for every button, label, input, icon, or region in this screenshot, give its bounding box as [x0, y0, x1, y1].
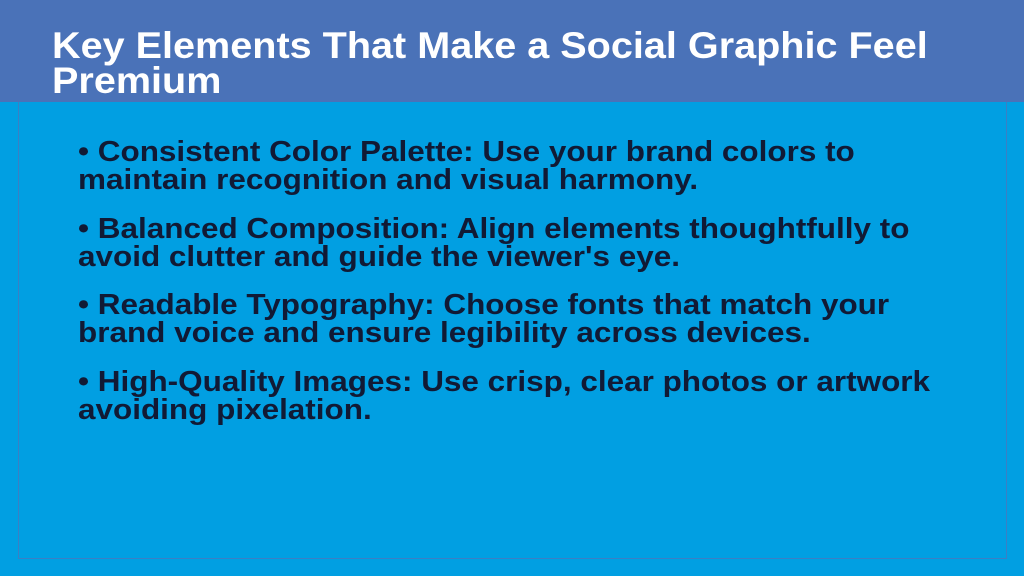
bullet: balanced composition — [78, 213, 909, 273]
title: Premium — [52, 60, 221, 101]
bullet: consistent color palette: maintain recognition and visual harmony. — [78, 164, 698, 196]
title: Key Elements That Make a Social Graphic Feel — [52, 25, 928, 66]
bullet: consistent color palette — [78, 136, 855, 196]
bullet list — [78, 136, 930, 426]
bullet: consistent color palette: • Consistent Color Palette: Use your brand colors to — [78, 136, 855, 168]
bullet: high-quality images — [78, 366, 930, 426]
bullet: readable typography: brand voice and ensure legibility across devices. — [78, 317, 811, 349]
bullet: readable typography: • Readable Typography: Choose fonts that match your — [78, 289, 889, 321]
header band — [0, 0, 1024, 102]
bullet: high-quality images: avoiding pixelation. — [78, 394, 372, 426]
bullet: balanced composition: • Balanced Composition: Align elements thoughtfully to — [78, 213, 909, 245]
bullet: balanced composition: avoid clutter and guide the viewer's eye. — [78, 241, 680, 273]
bullet: readable typography — [78, 289, 889, 349]
bullet: high-quality images: • High-Quality Images: Use crisp, clear photos or artwork — [78, 366, 930, 398]
title — [52, 25, 928, 101]
